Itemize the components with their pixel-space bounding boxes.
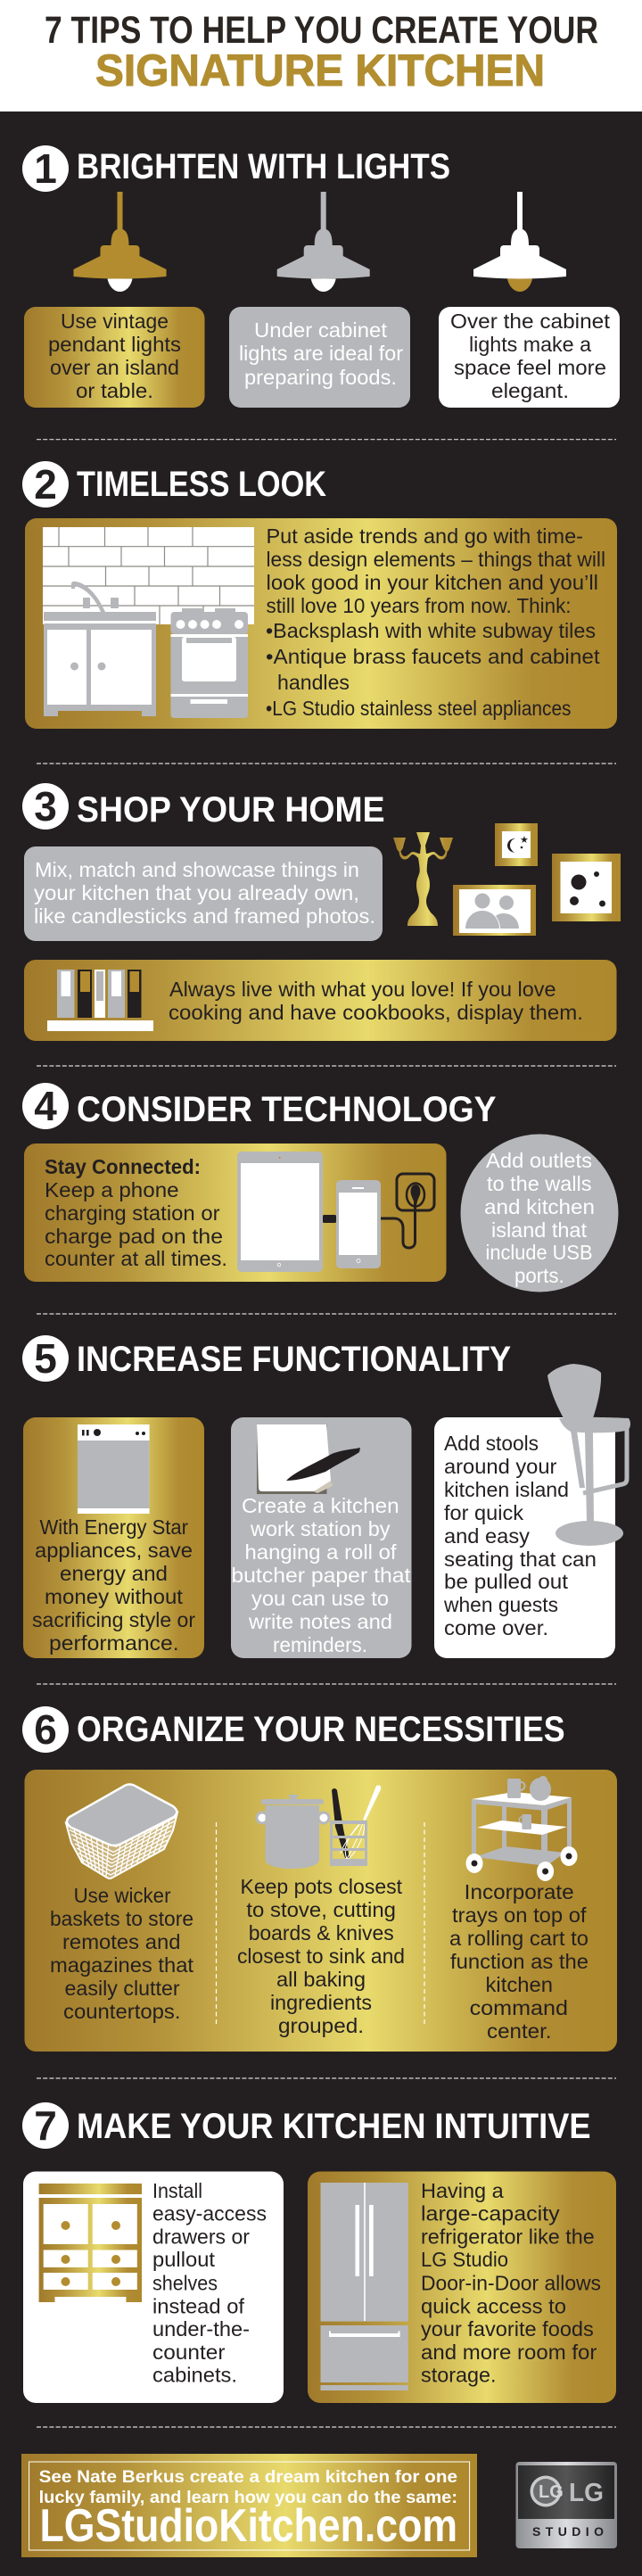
panel: butcher paper work station: write notes and bbox=[248, 1610, 392, 1633]
title: SIGNATURE KITCHEN bbox=[95, 45, 545, 95]
heading: tip 5: 5 bbox=[34, 1335, 57, 1382]
panel: butcher paper work station: hanging a roll of bbox=[244, 1540, 397, 1564]
heading: tip 1: BRIGHTEN WITH LIGHTS bbox=[77, 147, 450, 186]
panel: large-capacity refrigerator: refrigerator like the bbox=[421, 2225, 595, 2249]
panel: vintage pendant lights: pendant lights bbox=[48, 333, 181, 356]
panel: large-capacity refrigerator: LG Studio bbox=[421, 2248, 508, 2271]
heading: tip 2: 2 bbox=[34, 461, 57, 508]
panel: timeless look bbox=[25, 518, 617, 729]
icon: stock pot bbox=[257, 1795, 329, 1869]
text: wicker baskets: magazines that bbox=[50, 1953, 193, 1977]
panel: organize your necessities bbox=[25, 1770, 617, 2052]
text: timeless look: •Antique brass faucets and cabinet bbox=[266, 645, 600, 668]
footer call to action bbox=[21, 2454, 477, 2557]
icon: frame with dots bbox=[552, 854, 621, 921]
icon: frame with people bbox=[453, 885, 536, 936]
panel: large-capacity refrigerator: your favorite foods bbox=[421, 2317, 594, 2341]
text: rolling cart trays: function as the bbox=[450, 1950, 588, 1973]
panel: stay connected: charge pad on the bbox=[45, 1225, 223, 1248]
callout: add outlets: Add outlets bbox=[486, 1149, 592, 1172]
panel: energy star appliances: money without bbox=[45, 1585, 183, 1608]
text: keep pots closest: grouped. bbox=[278, 2014, 364, 2037]
text: keep pots closest: Keep pots closest bbox=[241, 1875, 402, 1898]
text: timeless look bbox=[266, 524, 605, 720]
panel: over cabinet lights: lights make a bbox=[469, 333, 592, 356]
footer call to action: See Nate Berkus create a dream kitchen for one bbox=[39, 2468, 457, 2487]
panel: stools: when guests bbox=[443, 1593, 558, 1616]
text: wicker baskets: Use wicker bbox=[74, 1884, 171, 1907]
heading: tip 1: 1 bbox=[34, 145, 57, 192]
panel: stools: kitchen island bbox=[444, 1478, 569, 1501]
panel: energy star appliances: With Energy Star bbox=[39, 1515, 188, 1539]
panel: stools: be pulled out bbox=[444, 1570, 568, 1593]
panel: stay connected: charging station or bbox=[45, 1201, 220, 1225]
panel: stay connected: counter at all times. bbox=[45, 1247, 227, 1270]
icon: refrigerator bbox=[321, 2183, 408, 2390]
panel: stay connected: Keep a phone bbox=[45, 1178, 179, 1201]
panel: energy star appliances: energy and bbox=[60, 1562, 168, 1585]
panel: mix and match: Mix, match and showcase things in bbox=[35, 858, 359, 881]
heading: tip 4: CONSIDER TECHNOLOGY bbox=[77, 1090, 497, 1129]
panel: stools bbox=[434, 1417, 615, 1658]
text: timeless look: •LG Studio stainless steel appliances bbox=[266, 697, 571, 720]
callout: add outlets: ports. bbox=[514, 1264, 564, 1287]
panel: live with what you love: Always live with what you love! If you love bbox=[169, 978, 556, 1001]
heading: tip 5: INCREASE FUNCTIONALITY bbox=[77, 1340, 511, 1379]
panel: vintage pendant lights: or table. bbox=[76, 379, 153, 402]
callout: add outlets: to the walls bbox=[487, 1172, 592, 1195]
text: rolling cart trays: Incorporate bbox=[465, 1880, 574, 1903]
panel: easy-access drawers: cabinets. bbox=[152, 2364, 237, 2387]
icon: frame with crescent: ★ bbox=[520, 835, 529, 846]
panel: large-capacity refrigerator: Having a bbox=[421, 2179, 505, 2202]
panel: easy-access drawers: drawers or bbox=[152, 2225, 250, 2249]
text: rolling cart trays: command bbox=[470, 1996, 568, 2019]
panel: vintage pendant lights: Use vintage bbox=[61, 310, 169, 333]
logo: LG Studio: LG bbox=[569, 2479, 604, 2507]
panel: under cabinet lights: Under cabinet bbox=[254, 318, 387, 342]
panel: over cabinet lights bbox=[439, 307, 620, 408]
panel: mix and match: your kitchen that you already own, bbox=[34, 881, 359, 904]
panel: stools: Add stools bbox=[444, 1432, 539, 1455]
panel: easy-access drawers: shelves bbox=[152, 2271, 218, 2294]
panel: stools: seating that can bbox=[444, 1548, 597, 1571]
title bbox=[45, 9, 598, 95]
text: rolling cart trays: center. bbox=[487, 2019, 551, 2043]
icon: bar stool bbox=[547, 1364, 630, 1546]
panel: stools: around your bbox=[444, 1455, 557, 1478]
icon: cookbooks on shelf bbox=[47, 970, 153, 1031]
text: keep pots closest: ingredients bbox=[270, 1991, 372, 2014]
panel: large-capacity refrigerator bbox=[308, 2171, 616, 2403]
footer call to action: lucky family, and learn how you can do the same: bbox=[39, 2489, 457, 2507]
panel: over cabinet lights: Over the cabinet bbox=[450, 310, 610, 333]
heading: tip 5 bbox=[22, 1335, 511, 1382]
heading: tip 1 bbox=[22, 145, 450, 192]
panel: large-capacity refrigerator: storage. bbox=[421, 2364, 496, 2387]
text: timeless look: •Backsplash with white subway tiles bbox=[266, 619, 596, 642]
text: timeless look: less design elements – things that will bbox=[266, 548, 605, 571]
panel: stay connected bbox=[24, 1144, 446, 1282]
text: wicker baskets: remotes and bbox=[62, 1930, 180, 1953]
panel: stay connected: Stay Connected: bbox=[45, 1155, 201, 1178]
heading: tip 6 bbox=[22, 1706, 565, 1753]
logo: LG Studio bbox=[515, 2462, 617, 2548]
icon: paper and pen bbox=[257, 1424, 360, 1494]
heading: tip 7: MAKE YOUR KITCHEN INTUITIVE bbox=[77, 2107, 590, 2146]
text: keep pots closest: boards & knives bbox=[249, 1921, 394, 1944]
illustration: subway tile backsplash bbox=[43, 527, 254, 624]
icon: phone bbox=[336, 1180, 381, 1268]
illustration: stove bbox=[171, 608, 248, 718]
callout: add outlets: and kitchen bbox=[484, 1195, 595, 1218]
heading: tip 2: TIMELESS LOOK bbox=[77, 465, 326, 504]
panel: mix and match bbox=[24, 846, 383, 941]
panel: large-capacity refrigerator: large-capacity bbox=[421, 2202, 560, 2225]
heading: tip 6: 6 bbox=[34, 1706, 57, 1753]
panel: easy-access drawers bbox=[23, 2171, 284, 2403]
panel: butcher paper work station: you can use to bbox=[251, 1587, 389, 1610]
panel: energy star appliances: appliances, save bbox=[35, 1539, 193, 1562]
illustration: sink cabinet and faucet bbox=[44, 582, 156, 716]
panel: live with what you love: cooking and have cookbooks, display them. bbox=[169, 1001, 583, 1024]
text: wicker baskets: countertops. bbox=[63, 2000, 180, 2023]
text: rolling cart trays: trays on top of bbox=[452, 1903, 587, 1927]
text: rolling cart trays: kitchen bbox=[485, 1973, 553, 1996]
panel: easy-access drawers: under-the- bbox=[152, 2317, 250, 2341]
panel: large-capacity refrigerator: Door-in-Door allows bbox=[421, 2271, 601, 2294]
panel: mix and match: like candlesticks and framed photos. bbox=[34, 904, 375, 928]
panel: stools: come over. bbox=[444, 1616, 548, 1639]
panel: vintage pendant lights: over an island bbox=[50, 356, 179, 379]
panel: butcher paper work station: reminders. bbox=[273, 1633, 367, 1656]
text: timeless look: still love 10 years from now. Think: bbox=[266, 594, 571, 617]
panel: butcher paper work station bbox=[231, 1417, 412, 1658]
panel: easy-access drawers: Install bbox=[152, 2179, 202, 2202]
panel: butcher paper work station: Create a kitchen bbox=[242, 1494, 399, 1517]
callout: add outlets bbox=[460, 1135, 619, 1292]
panel: under cabinet lights: lights are ideal for bbox=[239, 342, 403, 365]
panel: large-capacity refrigerator: quick access to bbox=[421, 2294, 566, 2317]
panel: stools: and easy bbox=[444, 1524, 530, 1548]
text: timeless look: look good in your kitchen and you’ll bbox=[266, 571, 598, 594]
footer call to action: LGStudioKitchen.com bbox=[39, 2500, 457, 2552]
text: rolling cart trays: a rolling cart to bbox=[449, 1927, 588, 1950]
panel: easy-access drawers: instead of bbox=[152, 2294, 244, 2317]
panel: vintage pendant lights bbox=[24, 307, 205, 408]
icon: white pendant lamp bbox=[473, 192, 566, 292]
callout: add outlets: include USB bbox=[485, 1241, 592, 1264]
icon: candelabra bbox=[393, 832, 453, 926]
text: keep pots closest bbox=[237, 1875, 405, 2037]
heading: tip 2 bbox=[22, 461, 326, 508]
heading: tip 4: 4 bbox=[34, 1083, 57, 1129]
text: timeless look: Put aside trends and go with time- bbox=[266, 524, 583, 548]
panel: large-capacity refrigerator: and more room for bbox=[421, 2341, 597, 2364]
panel: energy star appliances: performance. bbox=[49, 1631, 179, 1655]
icon: dishwasher bbox=[78, 1424, 150, 1514]
text: wicker baskets: easily clutter bbox=[64, 1977, 180, 2000]
icon: gold drawer cabinet bbox=[39, 2184, 142, 2302]
icon: frame with crescent bbox=[495, 823, 538, 866]
heading: tip 3: 3 bbox=[34, 783, 57, 830]
text: timeless look: handles bbox=[277, 671, 350, 694]
panel: over cabinet lights: space feel more bbox=[454, 356, 606, 379]
panel: energy star appliances bbox=[23, 1417, 204, 1658]
text: keep pots closest: to stove, cutting bbox=[246, 1898, 396, 1921]
text: wicker baskets bbox=[50, 1884, 193, 2023]
panel: over cabinet lights: elegant. bbox=[491, 379, 569, 402]
icon: gold pendant lamp bbox=[73, 192, 166, 292]
icon: utensil jar bbox=[330, 1786, 381, 1866]
text: wicker baskets: baskets to store bbox=[50, 1907, 193, 1930]
panel: easy-access drawers: easy-access bbox=[152, 2202, 267, 2225]
heading: tip 3 bbox=[22, 783, 385, 830]
icon: grey pendant lamp bbox=[277, 192, 370, 292]
panel: under cabinet lights bbox=[229, 307, 410, 408]
callout: add outlets: island that bbox=[491, 1218, 587, 1242]
icon: rolling cart bbox=[465, 1776, 578, 1881]
panel: butcher paper work station: butcher paper that bbox=[231, 1564, 411, 1587]
icon: charger plug and cable bbox=[323, 1174, 434, 1248]
heading: tip 3: SHOP YOUR HOME bbox=[77, 790, 385, 830]
icon: tablet bbox=[237, 1152, 323, 1272]
logo: LG Studio: STUDIO bbox=[532, 2524, 604, 2539]
heading: tip 7: 7 bbox=[34, 2102, 57, 2149]
panel: easy-access drawers: pullout bbox=[152, 2248, 215, 2271]
panel: under cabinet lights: preparing foods. bbox=[244, 366, 397, 389]
logo: LG Studio: LG bbox=[539, 2482, 564, 2502]
panel: stools: for quick bbox=[444, 1501, 523, 1524]
text: rolling cart trays bbox=[449, 1880, 588, 2043]
panel: easy-access drawers: counter bbox=[152, 2341, 226, 2364]
panel: butcher paper work station: work station by bbox=[250, 1517, 391, 1540]
heading: tip 6: ORGANIZE YOUR NECESSITIES bbox=[77, 1710, 565, 1749]
text: keep pots closest: all baking bbox=[276, 1968, 366, 1991]
icon: wicker basket bbox=[66, 1784, 177, 1878]
panel: energy star appliances: sacrificing style or bbox=[32, 1608, 195, 1631]
panel: live with what you love bbox=[24, 960, 617, 1041]
text: keep pots closest: closest to sink and bbox=[237, 1944, 405, 1968]
